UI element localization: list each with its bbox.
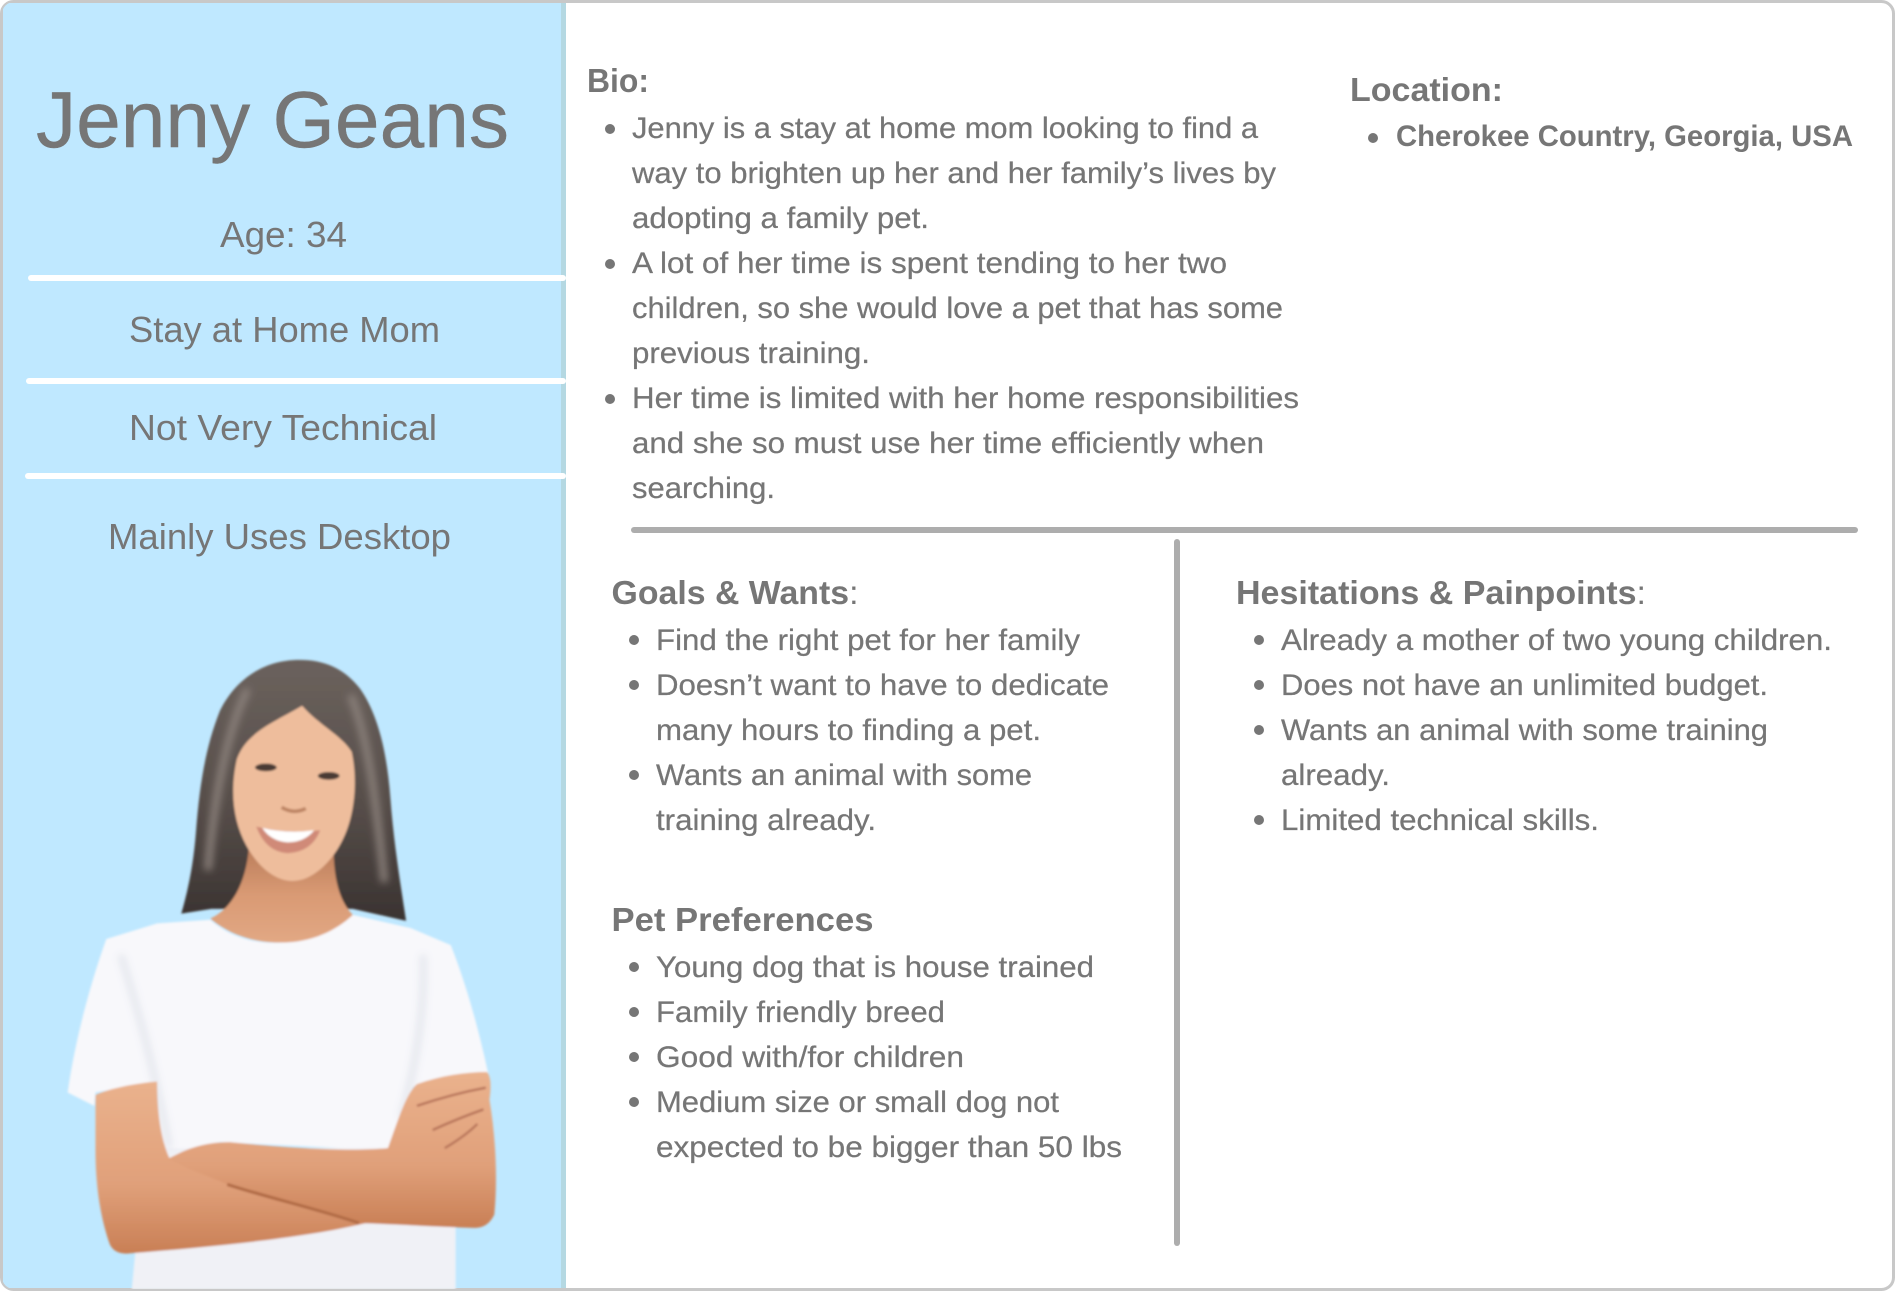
pet preferences heading: Pet Preferences: [612, 901, 874, 938]
bio heading: Bio:: [587, 62, 649, 99]
face: [233, 706, 355, 881]
bio bullet list: Jenny is a stay at home mom looking to find a: [632, 112, 1258, 145]
bio bullet list: children, so she would love a pet that has some: [632, 292, 1283, 325]
pet preferences bullet list: Family friendly breed: [656, 996, 945, 1029]
bio bullet list: searching.: [632, 472, 775, 505]
panel: hesitations and painpoints: [1236, 574, 1832, 837]
panel: location: [1350, 71, 1853, 153]
bio bullet list: A lot of her time is spent tending to her two: [632, 247, 1227, 280]
hesitations bullet list: Wants an animal with some training: [1281, 714, 1768, 747]
hesitations heading: Hesitations & Painpoints :: [1236, 574, 1646, 611]
bio bullet list: [605, 112, 1299, 505]
hesitations bullet list: already.: [1281, 759, 1390, 792]
hesitations bullet list: [1254, 624, 1832, 837]
pet preferences bullet list: Good with/for children: [656, 1041, 964, 1074]
location bullet: [1368, 133, 1378, 143]
pet preferences bullet list: [629, 951, 1122, 1164]
panel: goals and wants: [612, 574, 1109, 837]
goals bullet list: [629, 624, 1109, 837]
portrait photo: [68, 660, 496, 1290]
technical level: Not Very Technical: [129, 407, 437, 448]
goals bullet list: Wants an animal with some: [656, 759, 1032, 792]
arms: [95, 1072, 496, 1254]
bio bullet list: and she so must use her time efficiently when: [632, 427, 1264, 460]
device use: Mainly Uses Desktop: [108, 516, 451, 557]
hair: [181, 660, 406, 921]
goals bullet list: training already.: [656, 804, 876, 837]
occupation: Stay at Home Mom: [129, 309, 440, 350]
eyes, nose, mouth: [255, 764, 340, 853]
bio bullet list: previous training.: [632, 337, 870, 370]
hesitations bullet list: Limited technical skills.: [1281, 804, 1599, 837]
panel: bio: [587, 62, 1299, 505]
age: Age: 34: [220, 214, 347, 255]
goals bullet list: Doesn’t want to have to dedicate: [656, 669, 1109, 702]
location value: Cherokee Country, Georgia, USA: [1396, 120, 1853, 153]
location heading: Location:: [1350, 71, 1503, 108]
pet preferences bullet list: expected to be bigger than 50 lbs: [656, 1131, 1122, 1164]
hesitations bullet list: Already a mother of two young children.: [1281, 624, 1832, 657]
panel: pet preferences: [612, 901, 1122, 1164]
bio bullet list: way to brighten up her and her family’s lives by: [631, 157, 1276, 190]
pet preferences bullet list: Medium size or small dog not: [656, 1086, 1060, 1119]
t-shirt: [68, 915, 489, 1290]
neck: [210, 846, 353, 943]
goals bullet list: Find the right pet for her family: [656, 624, 1080, 657]
bio bullet list: adopting a family pet.: [632, 202, 929, 235]
name heading: Jenny Geans: [36, 75, 509, 164]
pet preferences bullet list: Young dog that is house trained: [656, 951, 1094, 984]
hesitations bullet list: Does not have an unlimited budget.: [1281, 669, 1768, 702]
goals heading: Goals & Wants:: [612, 574, 858, 611]
goals bullet list: many hours to finding a pet.: [656, 714, 1041, 747]
panel: profile sidebar: [3, 3, 566, 1290]
bio bullet list: Her time is limited with her home responsibilities: [632, 382, 1299, 415]
